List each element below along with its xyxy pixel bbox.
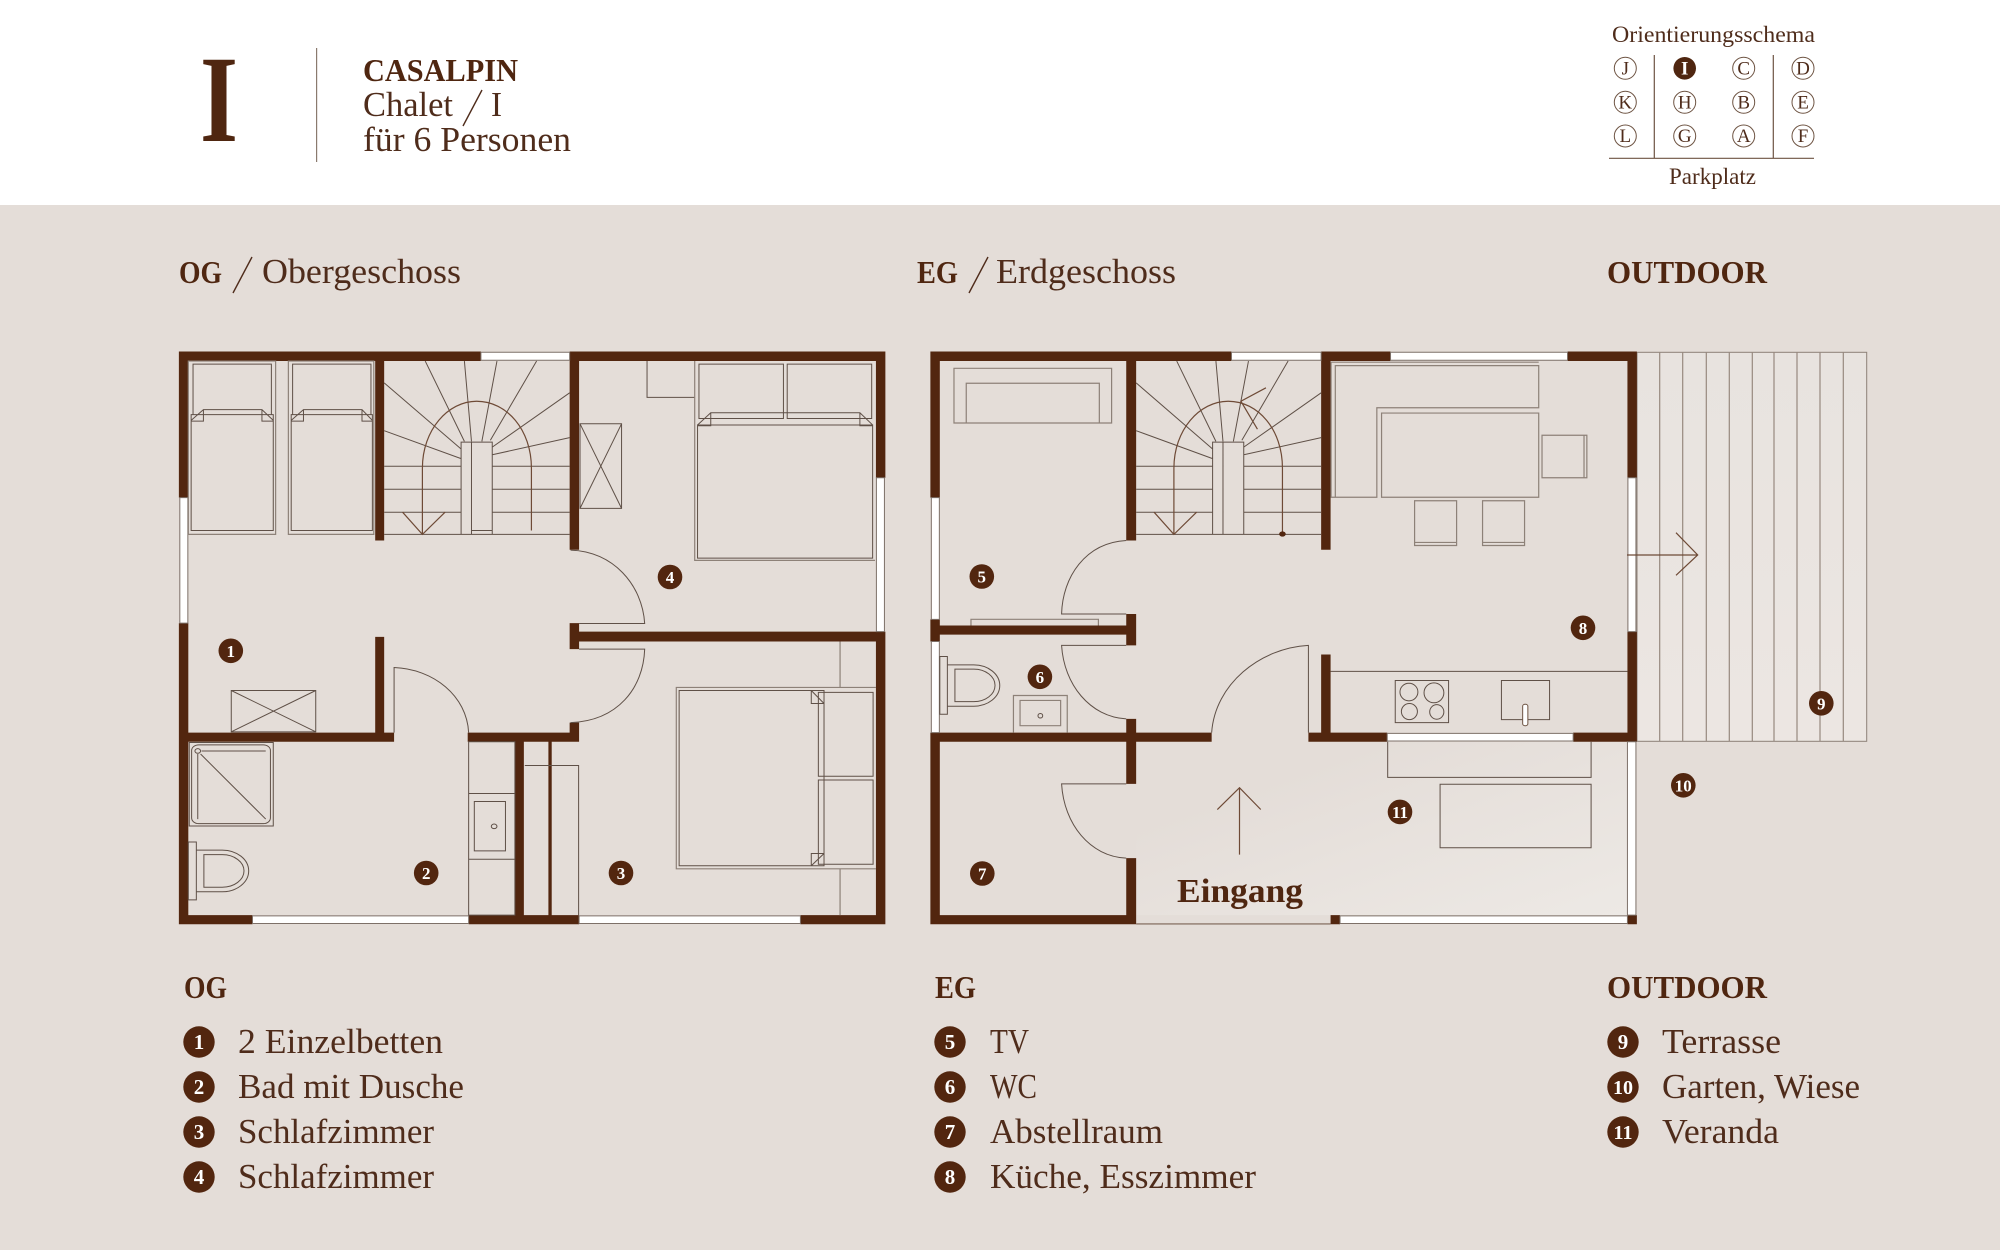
legend: OG: 1 — [194, 1030, 204, 1054]
plan markers: 5 — [978, 568, 986, 586]
bathroom fixtures — [188, 742, 579, 915]
plan markers: 3 — [617, 864, 625, 883]
legend: EG — [934, 969, 1256, 1196]
windows upper floor — [180, 352, 884, 924]
legend: EG: 7 — [945, 1120, 955, 1144]
plan markers: 1 — [227, 642, 235, 661]
legend: OUTDOOR: Garten, Wiese — [1662, 1067, 1860, 1106]
orientation schema — [1609, 22, 1815, 189]
heading: OUTDOOR: OUTDOOR — [1607, 254, 1768, 290]
plan markers: 9 — [1817, 694, 1826, 713]
legend: EG: EG — [935, 969, 976, 1005]
orientation schema: J — [1622, 58, 1629, 80]
lower staircase — [1136, 361, 1321, 534]
double bed room 3 — [676, 642, 876, 915]
plan markers: 11 — [1392, 803, 1408, 822]
orientation schema: F — [1798, 126, 1808, 147]
heading: EG Erdgeschoss: EG — [917, 254, 958, 290]
heading: OG Obergeschoss: OG — [179, 254, 222, 290]
heading: OG Obergeschoss: Obergeschoss — [262, 252, 461, 291]
orientation schema: K — [1618, 92, 1632, 114]
legend: EG: WC — [990, 1067, 1037, 1106]
legend: OUTDOOR: Veranda — [1662, 1112, 1779, 1151]
legend: EG: Küche, Esszimmer — [990, 1157, 1256, 1196]
legend: OG: 3 — [194, 1120, 204, 1144]
floor plan: Erdgeschoss — [930, 351, 1637, 924]
walls ground floor — [930, 351, 1637, 924]
plan markers — [218, 564, 1834, 886]
header divider — [316, 48, 317, 162]
walls upper floor — [179, 351, 885, 924]
wardrobes — [231, 361, 695, 732]
orientation schema: Orientierungsschema — [1612, 22, 1815, 47]
heading: EG Erdgeschoss: Erdgeschoss — [996, 252, 1176, 291]
upper doors — [394, 550, 645, 733]
orientation schema: G — [1678, 126, 1692, 147]
terrace arrow — [1627, 533, 1698, 575]
label: Eingang: Eingang — [1177, 873, 1303, 910]
orientation schema: C — [1737, 58, 1750, 80]
legend: OUTDOOR: 10 — [1613, 1077, 1633, 1099]
title block: für 6 Personen — [363, 120, 571, 159]
plan markers: 2 — [422, 864, 430, 883]
floor plan: Obergeschoss — [179, 351, 885, 924]
legend: OUTDOOR: OUTDOOR — [1607, 969, 1768, 1005]
title block — [363, 52, 571, 159]
legend: OUTDOOR: Terrasse — [1662, 1022, 1781, 1061]
legend: EG: 6 — [945, 1075, 955, 1099]
entrance threshold — [1136, 923, 1331, 925]
orientation schema: D — [1796, 58, 1810, 80]
plan markers: 6 — [1036, 668, 1044, 687]
orientation schema: B — [1737, 92, 1750, 114]
legend: EG: 5 — [945, 1030, 955, 1054]
legend: EG: Abstellraum — [990, 1112, 1163, 1151]
orientation schema: E — [1797, 92, 1809, 114]
lower doors — [1062, 541, 1308, 858]
legend: EG: TV — [990, 1022, 1029, 1061]
legend: OG — [183, 969, 464, 1196]
title block: CASALPIN — [363, 52, 518, 88]
upper staircase — [384, 361, 570, 534]
WC fixtures — [940, 656, 1000, 714]
legend: OUTDOOR: 9 — [1618, 1030, 1628, 1054]
chalet letter: I — [200, 31, 238, 168]
legend: OUTDOOR — [1607, 969, 1860, 1151]
single beds — [188, 361, 374, 534]
orientation schema: A — [1737, 126, 1751, 147]
legend: OG: 2 — [194, 1075, 204, 1099]
legend: OG: 2 Einzelbetten — [238, 1022, 443, 1061]
heading: OG Obergeschoss — [179, 252, 461, 293]
veranda furniture — [1388, 742, 1591, 848]
double bed room 4 — [695, 361, 875, 560]
heading: EG Erdgeschoss — [917, 252, 1176, 293]
kitchen counter — [1331, 671, 1627, 723]
plan markers: 7 — [978, 864, 987, 884]
legend: OG: Schlafzimmer — [238, 1112, 434, 1151]
terrace decking — [1637, 352, 1867, 741]
legend: OG: Schlafzimmer — [238, 1157, 434, 1196]
plan markers: 10 — [1675, 776, 1692, 795]
orientation schema: L — [1619, 126, 1631, 147]
entrance arrow — [1217, 788, 1261, 855]
plan markers: 8 — [1579, 619, 1587, 638]
dining bench and table — [1331, 362, 1587, 545]
plan markers: 4 — [666, 568, 675, 587]
title block: I — [491, 85, 502, 124]
orientation schema: H — [1678, 92, 1692, 114]
header band — [0, 0, 2000, 205]
legend: OUTDOOR: 11 — [1614, 1122, 1632, 1144]
windows ground floor — [931, 352, 1636, 924]
orientation schema: I — [1681, 58, 1688, 80]
legend: OG: OG — [184, 969, 227, 1005]
legend: OG: Bad mit Dusche — [238, 1067, 464, 1106]
legend: EG: 8 — [945, 1165, 955, 1189]
veranda floor — [1136, 742, 1627, 915]
title block: Chalet — [363, 85, 453, 124]
legend: OG: 4 — [194, 1165, 205, 1189]
tv and sofa — [954, 368, 1112, 625]
orientation schema: Parkplatz — [1669, 164, 1756, 189]
